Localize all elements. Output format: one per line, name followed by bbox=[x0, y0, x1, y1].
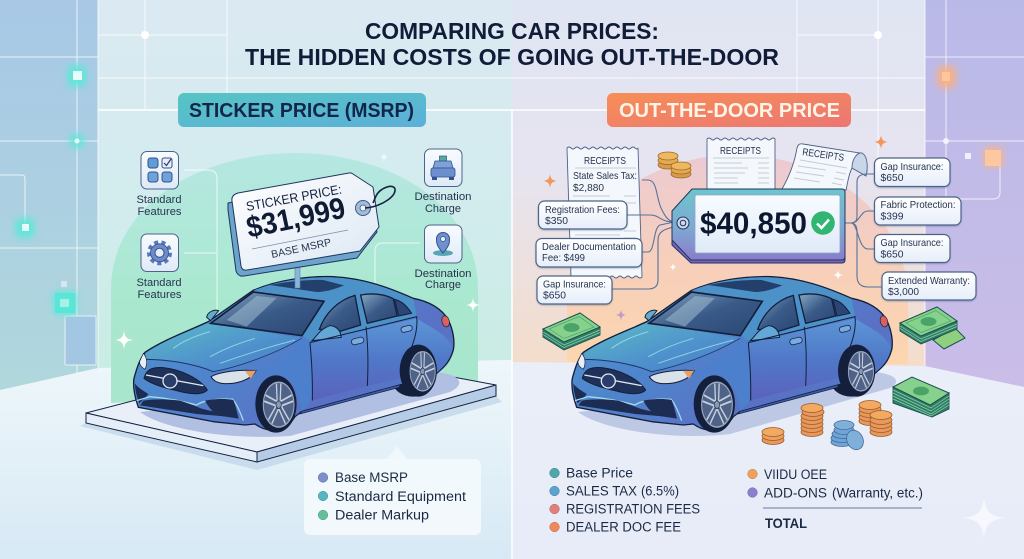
cash stack upper right bbox=[900, 307, 965, 349]
label: destination charge 1 bbox=[414, 191, 472, 215]
label: standard features 1 bbox=[136, 194, 182, 218]
out-the-door price tag: $40,850 bbox=[700, 206, 807, 240]
callout: gap insurance right top bbox=[874, 158, 950, 186]
right car: blue sedan bbox=[572, 277, 892, 433]
callout: fabric protection: $399 bbox=[880, 210, 904, 222]
left car: blue sedan bbox=[134, 277, 454, 433]
connector wires left bbox=[612, 180, 674, 289]
callout: extended warranty: Extended Warranty: bbox=[888, 275, 970, 287]
callout: gap insurance right lower: $650 bbox=[880, 248, 904, 260]
right floor bbox=[512, 362, 1024, 559]
right legend column 2: TOTAL bbox=[765, 516, 807, 531]
sticker price tag: $31,999 bbox=[244, 192, 348, 245]
faint corner sparkle bbox=[964, 498, 1004, 538]
right legend column 1: SALES TAX bbox=[566, 484, 637, 498]
receipt: left with state sales tax: State Sales Tax: bbox=[573, 170, 637, 182]
coin stack blue bbox=[831, 420, 866, 452]
right car shadow bbox=[578, 372, 896, 436]
coin stack tall bbox=[801, 404, 824, 436]
sparkles right bbox=[543, 135, 888, 320]
heading: sticker price badge: STICKER PRICE (MSRP) bbox=[189, 100, 414, 122]
callout: gap insurance left: $650 bbox=[543, 290, 566, 302]
callout: fabric protection: Fabric Protection: bbox=[880, 199, 956, 211]
label: destination charge 2: Destination bbox=[414, 268, 472, 280]
right glow dome bbox=[567, 155, 908, 364]
right legend column 1: DEALER DOC FEE bbox=[566, 520, 681, 534]
left floor bbox=[0, 360, 512, 559]
callout: gap insurance right top: Gap Insurance: bbox=[880, 161, 944, 173]
glowing nodes right bbox=[874, 31, 1002, 166]
receipt: middle bbox=[707, 138, 775, 192]
heading: out-the-door price badge: OUT-THE-DOOR PRICE bbox=[619, 100, 840, 122]
callout: gap insurance right lower bbox=[874, 234, 950, 262]
sparkles left bbox=[115, 152, 480, 349]
icon: car with destination sign bbox=[424, 149, 462, 186]
receipt: right curled bbox=[782, 144, 867, 190]
glowing nodes left bbox=[16, 31, 149, 314]
receipt: left with state sales tax: $2,880 bbox=[573, 182, 604, 194]
coin stack small bbox=[762, 428, 784, 444]
label: standard features 2: Features bbox=[138, 289, 182, 301]
left side panel rectangle bbox=[65, 316, 96, 365]
left legend card bbox=[304, 446, 481, 535]
left legend card: Dealer Markup bbox=[335, 508, 429, 522]
left glow dome bbox=[111, 153, 478, 403]
label: standard features 1: Features bbox=[138, 206, 182, 218]
callout: registration fees: Registration Fees: bbox=[545, 204, 620, 216]
background: right side wall bbox=[925, 0, 1024, 400]
right legend column 2: (Warranty, etc.) bbox=[832, 486, 923, 500]
callout: dealer documentation fee bbox=[536, 238, 642, 267]
label: destination charge 1: Charge bbox=[425, 203, 461, 215]
right legend column 2: VIIDU OEE bbox=[764, 467, 827, 482]
title bbox=[245, 18, 779, 70]
callout: dealer documentation fee: Fee: $499 bbox=[542, 252, 585, 264]
label: standard features 2 bbox=[136, 277, 182, 301]
right legend column 2 bbox=[748, 467, 923, 531]
callout: gap insurance right top: $650 bbox=[880, 172, 904, 184]
icon: location pin bbox=[424, 225, 462, 263]
label: destination charge 2 bbox=[414, 268, 472, 291]
heading: sticker price badge bbox=[178, 93, 426, 127]
label: destination charge 1: Destination bbox=[414, 191, 472, 203]
receipt: left with state sales tax: RECEIPTS bbox=[584, 156, 626, 167]
receipt: left with state sales tax bbox=[567, 147, 642, 278]
right legend column 1: (6.5%) bbox=[641, 484, 679, 498]
platform under left car bbox=[80, 374, 502, 470]
callout: registration fees bbox=[538, 201, 627, 229]
coin stacks right bbox=[859, 400, 892, 436]
background: right main wall bbox=[512, 0, 925, 380]
label: standard features 2: Standard bbox=[136, 277, 182, 289]
sticker price tag: STICKER PRICE: bbox=[245, 182, 343, 214]
callout: extended warranty bbox=[882, 272, 976, 300]
callout: dealer documentation fee: Dealer Documentation bbox=[542, 241, 636, 253]
background: left main wall bbox=[98, 0, 512, 380]
callout: gap insurance left bbox=[537, 276, 612, 304]
car shadow on platform bbox=[140, 372, 459, 437]
title: COMPARING CAR PRICES: bbox=[365, 18, 659, 44]
connector wires right bbox=[845, 174, 882, 287]
receipt: right curled: RECEIPTS bbox=[802, 147, 845, 164]
label: standard features 1: Standard bbox=[136, 194, 182, 206]
background: left side wall bbox=[0, 0, 98, 400]
right legend column 1: REGISTRATION FEES bbox=[566, 502, 700, 516]
icon: gear bbox=[141, 234, 178, 272]
right legend column 1 bbox=[550, 466, 700, 534]
sticker price tag: BASE MSRP bbox=[270, 237, 332, 261]
callout: fabric protection bbox=[874, 197, 961, 225]
left legend card: Base MSRP bbox=[335, 470, 408, 485]
left legend card: Standard Equipment bbox=[335, 489, 466, 504]
heading: out-the-door price badge bbox=[607, 93, 851, 127]
title: THE HIDDEN COSTS OF GOING OUT-THE-DOOR bbox=[245, 44, 779, 70]
callout: extended warranty: $3,000 bbox=[888, 286, 919, 298]
callout: gap insurance right lower: Gap Insurance: bbox=[880, 237, 944, 249]
sticker price tag bbox=[228, 173, 395, 288]
icon: standard features checklist bbox=[141, 152, 178, 189]
right legend column 1: Base Price bbox=[566, 466, 633, 480]
out-the-door price tag bbox=[672, 189, 845, 263]
callout: gap insurance left: Gap Insurance: bbox=[543, 278, 606, 290]
label: destination charge 2: Charge bbox=[425, 279, 461, 291]
receipt: middle: RECEIPTS bbox=[720, 146, 761, 157]
cash stack lower right bbox=[893, 377, 949, 417]
coins beside receipts bbox=[658, 152, 691, 178]
callout: registration fees: $350 bbox=[545, 215, 568, 227]
right legend column 2: ADD-ONS bbox=[764, 486, 827, 500]
cash stack left bbox=[543, 313, 600, 350]
